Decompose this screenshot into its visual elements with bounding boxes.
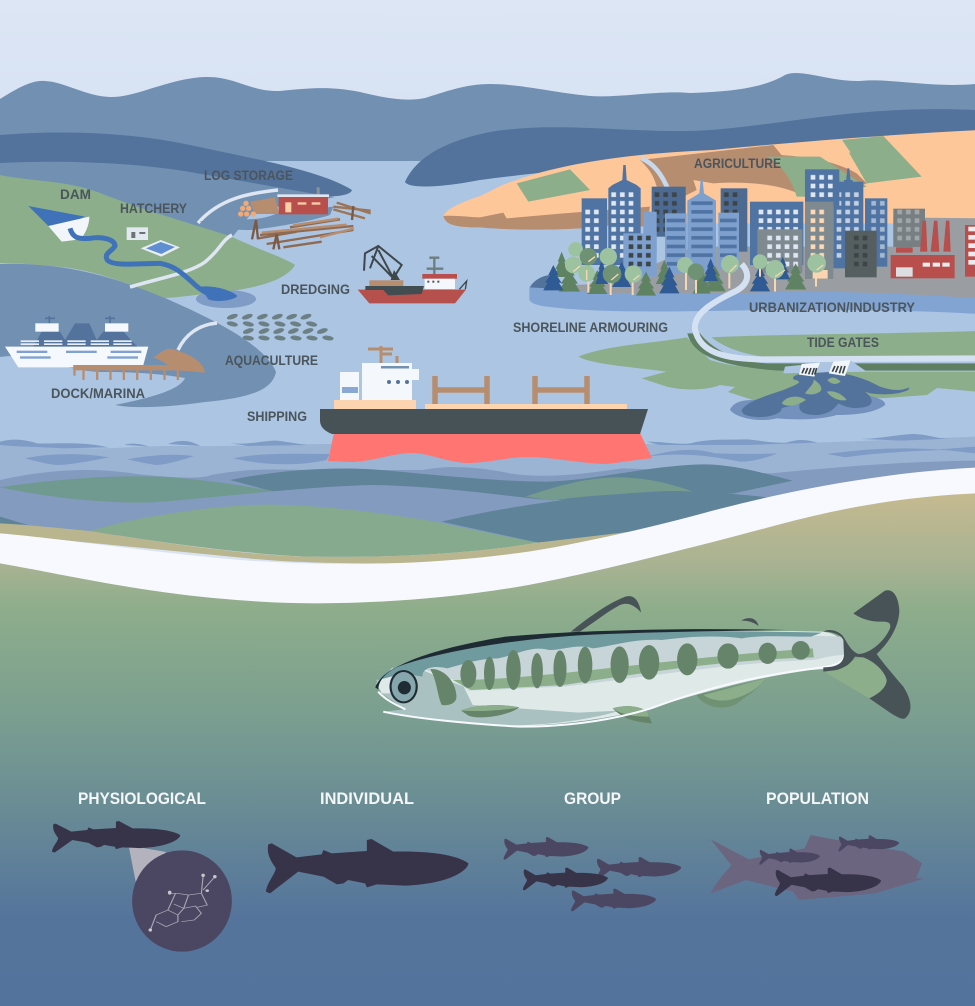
distant mountains <box>0 73 975 175</box>
upper marsh strip <box>712 331 975 357</box>
icon: group fish 3 <box>523 868 608 890</box>
tail dark outline and lobes <box>823 590 910 719</box>
tan shore <box>0 523 678 563</box>
snout <box>376 667 393 693</box>
mast <box>368 346 397 363</box>
underwater gradient <box>0 485 975 1006</box>
dock <box>73 349 205 380</box>
label: urbanization/industry: URBANIZATION/INDUSTRY <box>749 300 915 315</box>
cabin <box>362 363 412 400</box>
icon: population fish 2 <box>759 849 820 865</box>
labels: coastal stressors <box>51 156 915 424</box>
icon: molecule lens <box>132 850 232 952</box>
parr marks <box>430 641 810 705</box>
green fields <box>517 169 590 202</box>
land: green peninsula <box>0 175 295 298</box>
tide flats and gates <box>730 360 909 420</box>
coastal hills <box>0 461 975 557</box>
hill: sage right <box>525 477 693 501</box>
icon: physiological fish <box>52 821 180 853</box>
land: back right island <box>405 109 975 186</box>
hill: teal back <box>230 464 793 500</box>
heading: physiological: PHYSIOLOGICAL <box>78 790 206 808</box>
ventral fin <box>613 706 652 723</box>
hill: green front <box>90 505 538 557</box>
gate outflow pool <box>783 360 867 373</box>
label: log storage: LOG STORAGE <box>204 168 293 183</box>
marsh islets <box>782 378 847 406</box>
dorsal fin <box>571 596 641 632</box>
grey urban ground <box>530 217 975 298</box>
trees <box>543 242 826 296</box>
peach fields <box>443 130 975 227</box>
label: shipping: SHIPPING <box>247 409 307 424</box>
icon: population fish 3 <box>775 868 881 896</box>
red hull <box>328 433 652 464</box>
mud channels <box>742 372 909 417</box>
lake base <box>196 290 256 308</box>
farm road <box>642 158 668 190</box>
label: tide gates: TIDE GATES <box>807 335 879 350</box>
fish level icons <box>52 821 925 952</box>
sky <box>0 0 975 140</box>
large juvenile salmon <box>375 590 910 727</box>
hill: periwinkle back <box>0 461 975 543</box>
flats halo <box>730 393 885 420</box>
left shore drawing group <box>5 187 467 380</box>
farmland and city <box>443 130 975 400</box>
dark hull <box>320 409 648 434</box>
under fin <box>696 678 765 708</box>
label: dam: DAM <box>60 187 91 202</box>
hill: sage left <box>0 476 283 503</box>
lateral band <box>453 648 814 690</box>
armoured shoreline <box>529 275 975 314</box>
dredging boat <box>358 246 467 303</box>
body and fins <box>375 596 846 727</box>
label: dredging: DREDGING <box>281 282 350 297</box>
brown soil <box>443 207 650 230</box>
pectoral fin <box>461 705 519 717</box>
road: upper left <box>198 190 278 223</box>
upper flank <box>422 635 845 691</box>
tan shore and foam band <box>0 468 975 603</box>
heading: individual: INDIVIDUAL <box>320 790 414 808</box>
land: mid left shore <box>0 162 335 240</box>
tide gates <box>799 360 851 377</box>
ferry <box>5 316 148 367</box>
head and belly shade <box>376 670 620 725</box>
marsh <box>578 337 975 400</box>
factory <box>891 221 975 278</box>
road: aquaculture shore <box>178 323 217 350</box>
icon: physiological zoom cone <box>129 845 166 882</box>
icon: population fish 1 <box>838 835 899 851</box>
cranes <box>435 376 587 404</box>
dike <box>687 333 975 371</box>
label: dock/marina: DOCK/MARINA <box>51 386 145 401</box>
water <box>0 161 975 451</box>
hill: teal left sliver <box>0 517 28 525</box>
icon: group fish 2 <box>596 857 681 880</box>
hill: periwinkle middle <box>0 485 553 532</box>
road: peninsula <box>130 235 232 287</box>
buildings <box>582 165 925 279</box>
land: back left island <box>0 132 352 196</box>
road: shore <box>695 264 975 359</box>
aquaculture pens <box>226 313 334 341</box>
tail green lobe <box>825 657 887 698</box>
sea waves <box>0 434 975 530</box>
icon: group fish 4 <box>571 889 656 911</box>
label: agriculture: AGRICULTURE <box>694 156 781 171</box>
icon: group fish 1 <box>503 837 589 860</box>
white foam band <box>0 468 975 603</box>
back <box>378 631 822 680</box>
belly highlight <box>378 654 845 727</box>
hatchery <box>127 227 180 257</box>
label: shoreline armouring: SHORELINE ARMOURING <box>513 320 668 335</box>
land: lower left shore <box>0 264 276 407</box>
eye <box>389 670 418 703</box>
heading: group: GROUP <box>564 790 621 808</box>
body <box>376 631 846 726</box>
icon: population large silhouette <box>711 835 925 900</box>
dam <box>28 206 237 301</box>
level labels <box>78 790 869 808</box>
adipose fin <box>741 618 759 626</box>
log storage <box>200 187 371 249</box>
back line <box>375 629 785 689</box>
icon: individual fish <box>266 839 468 893</box>
shipping vessel <box>320 346 652 464</box>
label: aquaculture: AQUACULTURE <box>225 353 318 368</box>
heading: population: POPULATION <box>766 790 869 808</box>
label: hatchery: HATCHERY <box>120 201 187 216</box>
decks <box>334 400 416 409</box>
hill: teal front <box>441 491 777 543</box>
